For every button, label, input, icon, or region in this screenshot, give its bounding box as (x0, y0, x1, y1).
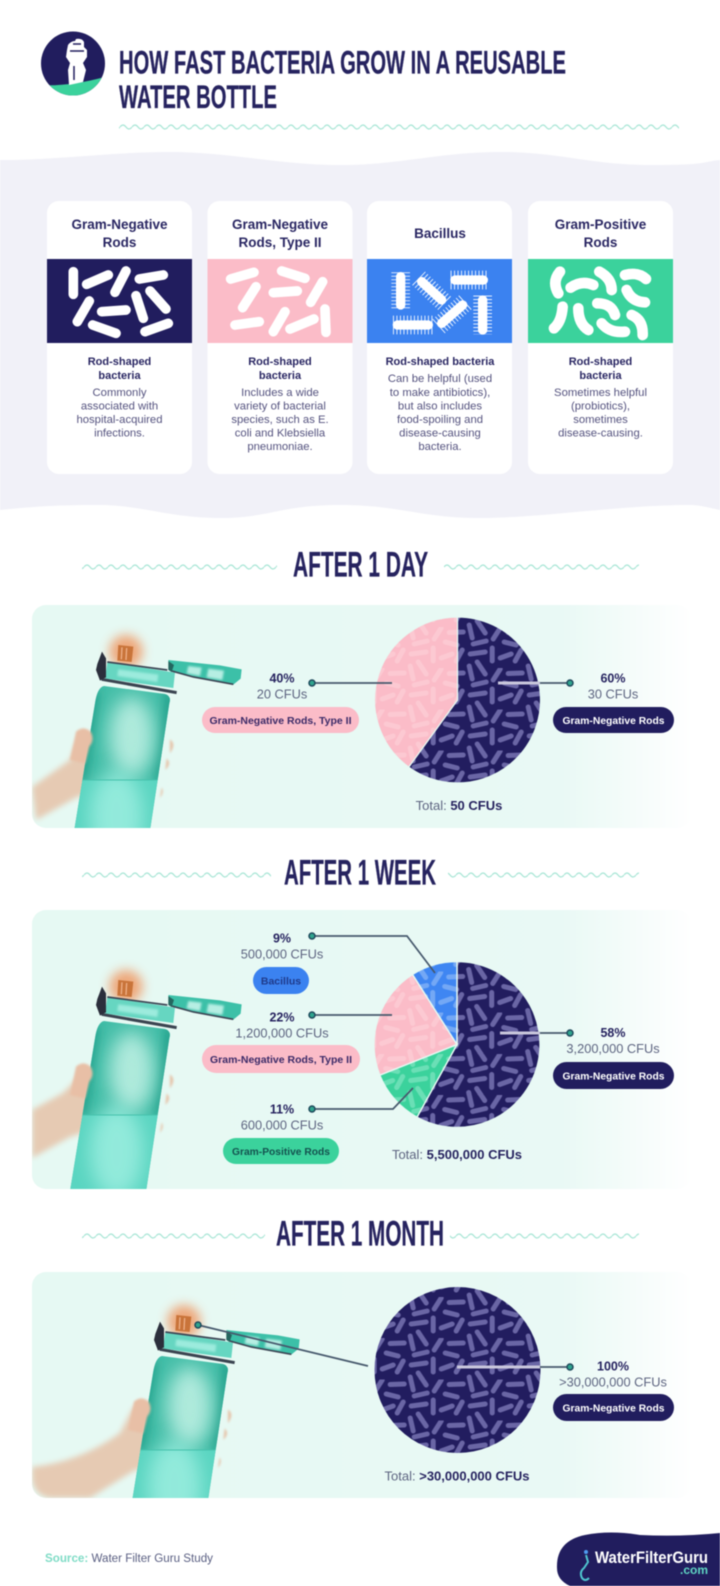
logo: WaterFilterGuru.com: WaterFilterGuru (595, 1549, 708, 1567)
card description: hospital-acquired (76, 414, 163, 426)
icon: gram-positive rods (528, 259, 673, 343)
card description: (probiotics), (571, 400, 630, 412)
card: Gram-Negative Rods (47, 201, 192, 474)
icon: bacillus (367, 259, 512, 343)
icon: gram-negative rods (47, 259, 192, 343)
callout: 100%: 100% (597, 1360, 629, 1374)
card description: bacteria (98, 370, 141, 382)
callout: 58% (500, 1026, 674, 1089)
callout: 22% (202, 1010, 392, 1073)
card description (554, 356, 647, 440)
card description: to make antibiotics), (390, 387, 490, 399)
header icon: bottle badge (38, 32, 108, 100)
callout: 22%: 22% (269, 1010, 295, 1024)
card description: but also includes (398, 400, 482, 412)
pie chart: 1 day (375, 617, 541, 783)
card description: pneumoniae. (247, 441, 313, 453)
card description: bacteria (579, 370, 622, 382)
panel: bacteria types band (0, 152, 720, 518)
source: Source: Water Filter Guru Study (45, 1553, 213, 1565)
callout: 11% (223, 1088, 413, 1164)
panel: after 1 week (32, 910, 675, 1190)
card description: Rod-shaped (248, 356, 312, 368)
logo icon (581, 1550, 589, 1580)
title (119, 44, 566, 115)
logo: WaterFilterGuru.com: .com (680, 1563, 708, 1577)
callout: 40%: 20 CFUs (257, 686, 307, 702)
card description: Rod-shaped bacteria (386, 356, 495, 368)
icon: type II rods (208, 259, 352, 343)
logo: WaterFilterGuru.com (557, 1532, 720, 1586)
callout: 9%: 500,000 CFUs (241, 946, 323, 962)
card heading: Gram-Negative (232, 217, 329, 232)
card description: Sometimes helpful (554, 387, 647, 399)
callout: 60%: 60% (600, 672, 626, 686)
card description: infections. (94, 428, 145, 440)
callout: 60% (498, 672, 674, 733)
card heading: Gram-Positive (555, 217, 647, 232)
title wave underline (119, 123, 679, 131)
callout line to bottle (195, 1322, 368, 1366)
heading: after 1 month (82, 1214, 639, 1254)
card heading: Bacillus (414, 226, 466, 241)
callout: 40%: Gram-Negative Rods, Type II (210, 715, 352, 727)
callout: 11%: 600,000 CFUs (241, 1118, 323, 1132)
panel: after 1 month (32, 1272, 675, 1499)
callout: 11%: Gram-Positive Rods (232, 1146, 330, 1158)
heading: after 1 day: AFTER 1 DAY (293, 546, 428, 584)
card description: bacteria. (418, 441, 462, 453)
total: 5,500,000 CFUs: Total: 5,500,000 CFUs (392, 1147, 522, 1162)
callout: 40%: 40% (269, 672, 295, 686)
callout: 100% (457, 1360, 674, 1421)
card description (231, 356, 329, 453)
pie chart: 1 month (374, 1287, 540, 1453)
callout: 22%: 1,200,000 CFUs (235, 1026, 329, 1040)
illustration: hand holding bottle (32, 628, 242, 829)
card description: species, such as E. (231, 414, 329, 426)
total: >30,000,000 CFUs: Total: >30,000,000 CFUs (385, 1468, 529, 1484)
illustration: hand holding bottle (32, 963, 242, 1190)
heading: after 1 week (82, 854, 639, 892)
callout: 58%: 58% (600, 1026, 626, 1040)
callout: 9%: Bacillus (261, 976, 301, 988)
heading: after 1 week: AFTER 1 WEEK (284, 854, 436, 892)
card description: associated with (81, 400, 158, 412)
callout: 100%: >30,000,000 CFUs (559, 1374, 667, 1390)
card description: coli and Klebsiella (235, 428, 326, 440)
card heading: Rods, Type II (238, 235, 322, 250)
callout: 100%: Gram-Negative Rods (562, 1402, 665, 1414)
callout: 9% (241, 932, 435, 994)
card heading: Rods (584, 235, 617, 250)
card description: variety of bacterial (234, 400, 326, 412)
card: Gram-Negative Rods, Type II (208, 201, 352, 474)
card description: Commonly (92, 387, 147, 399)
card heading: Rods (103, 235, 136, 250)
card description: Rod-shaped (569, 356, 632, 368)
card description: Rod-shaped (88, 356, 151, 368)
card description: disease-causing. (558, 428, 643, 440)
card description (76, 356, 163, 440)
panel: after 1 day (32, 605, 675, 829)
callout: 9%: 9% (273, 932, 291, 946)
callout: 11%: 11% (270, 1102, 294, 1116)
callout: 58%: Gram-Negative Rods (562, 1070, 665, 1082)
callout: 58%: 3,200,000 CFUs (566, 1041, 660, 1056)
card description: food-spoiling and (397, 414, 483, 426)
total: 50 CFUs: Total: 50 CFUs (416, 798, 502, 813)
callout: 22%: Gram-Negative Rods, Type II (210, 1054, 352, 1066)
card: Bacillus (367, 201, 512, 474)
card description: bacteria (259, 370, 302, 382)
pie chart: 1 week (374, 962, 540, 1128)
callout: 60%: 30 CFUs (588, 686, 638, 702)
card description: disease-causing (399, 428, 481, 440)
heading: after 1 day (82, 546, 639, 584)
callout: 40% (202, 672, 392, 733)
card: Gram-Positive Rods (528, 201, 673, 474)
card description: Can be helpful (used (388, 373, 492, 385)
card heading: Gram-Negative (71, 217, 168, 232)
callout: 60%: Gram-Negative Rods (562, 715, 665, 727)
heading: after 1 month: AFTER 1 MONTH (276, 1214, 444, 1254)
card description: sometimes (573, 414, 628, 426)
illustration: hand holding bottle (32, 1298, 300, 1499)
card description (386, 356, 495, 453)
card description: Includes a wide (241, 387, 319, 399)
title: WATER BOTTLE (119, 79, 277, 115)
